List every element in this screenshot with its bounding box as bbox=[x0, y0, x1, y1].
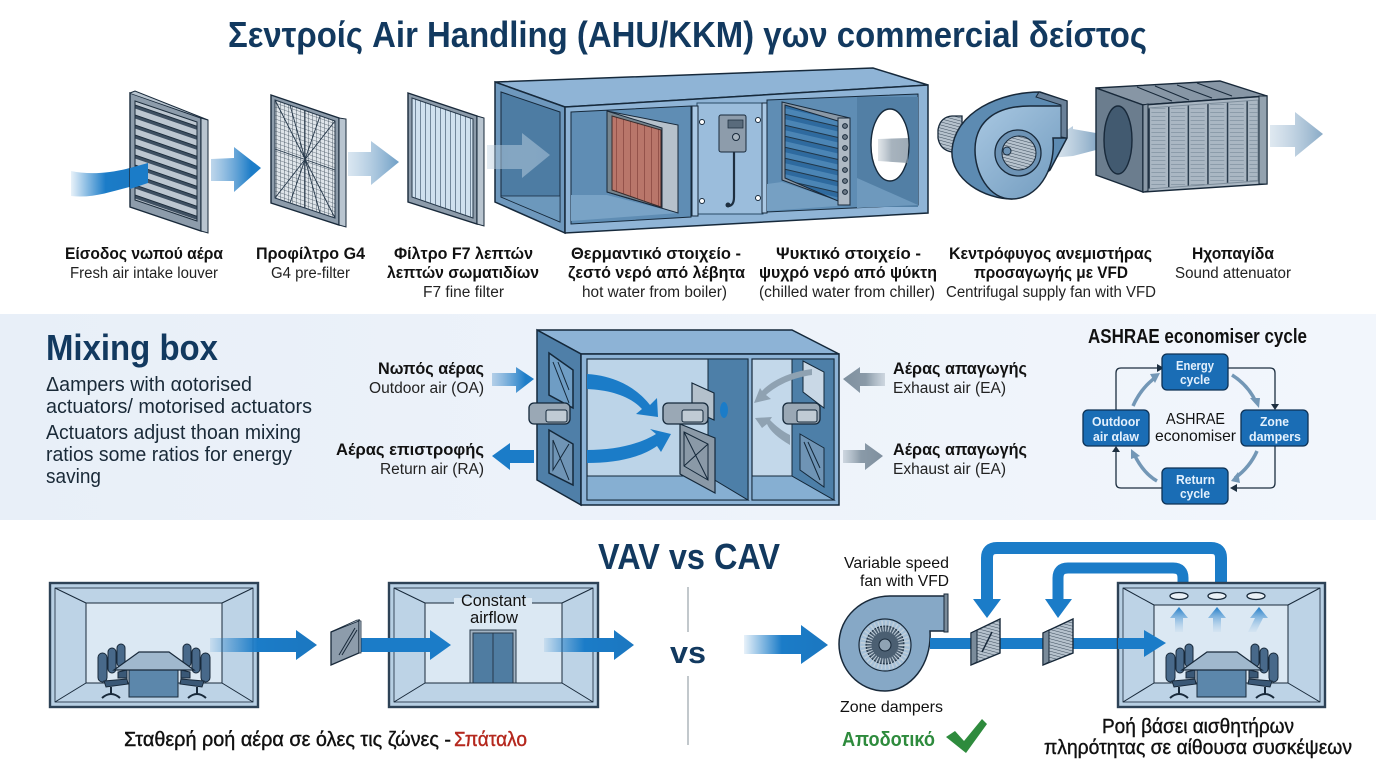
box left face bbox=[537, 330, 581, 505]
icon: CAV damper bbox=[331, 620, 361, 665]
label: F7: λεπτών σωματιδίων bbox=[387, 263, 539, 282]
label: heating coil: hot water from boiler) bbox=[582, 284, 727, 301]
arrow: intake air into louver bbox=[71, 163, 148, 197]
panel: mixing box band bbox=[0, 314, 1376, 520]
VAV room bbox=[1118, 583, 1325, 707]
label: attenuator: Sound attenuator bbox=[1175, 265, 1291, 282]
icon: F7 fine filter bbox=[408, 93, 484, 226]
arrow: attenuator outlet bbox=[1270, 112, 1323, 157]
ASHRAE economiser cycle bbox=[1083, 326, 1308, 504]
label: fan: Centrifugal supply fan with VFD bbox=[946, 284, 1156, 301]
heading: mixing box: Mixing box bbox=[46, 327, 218, 368]
centre label: economiser bbox=[1155, 428, 1237, 445]
icon: sound attenuator bbox=[1096, 81, 1267, 192]
icon: G4 pre-filter bbox=[271, 95, 346, 227]
label: G4: Προφίλτρο G4 bbox=[256, 244, 366, 263]
vs label: vs bbox=[670, 635, 706, 670]
caption: VAV bbox=[1044, 716, 1352, 759]
label: heating coil: Θερμαντικό στοιχείο - bbox=[571, 244, 741, 263]
label: cooling coil: Ψυκτικό στοιχείο - bbox=[776, 244, 921, 263]
arrow: CAV 2 bbox=[361, 630, 451, 660]
arrow: coil to fan bbox=[878, 138, 908, 163]
labels: mixing left: Return air (RA) bbox=[380, 461, 484, 478]
casing front face bbox=[565, 85, 928, 233]
ceiling vents bbox=[1170, 592, 1265, 600]
right actuator bbox=[783, 403, 820, 424]
node: energy cycle: cycle bbox=[1180, 372, 1210, 387]
label: louver: Είσοδος νωπού αέρα bbox=[65, 244, 223, 263]
exhaust chamber bbox=[752, 359, 834, 500]
icon: fresh air louver bbox=[130, 91, 208, 233]
label: G4: G4 pre-filter bbox=[271, 265, 350, 282]
title: Σεντροίς Air Handling (AHU/KKM) γων commercial δείστος bbox=[228, 14, 1147, 55]
arrow: fan to attenuator bbox=[1050, 126, 1096, 158]
CAV room 1 bbox=[50, 583, 258, 707]
constant airflow label bbox=[461, 591, 526, 627]
caption: VAV: πληρότητας σε αίθουσα συσκέψεων bbox=[1044, 737, 1352, 759]
node: zone dampers: dampers bbox=[1249, 429, 1301, 444]
centre label bbox=[1155, 411, 1237, 445]
connector arrowheads bbox=[1112, 364, 1279, 492]
label: fan bbox=[946, 244, 1156, 301]
mixing box casing bbox=[529, 330, 839, 505]
casing left open face bbox=[495, 82, 565, 233]
arrow: grey exhaust top bbox=[754, 369, 812, 403]
grey cycle arrowheads bbox=[1131, 373, 1260, 483]
node: energy cycle bbox=[1162, 354, 1228, 390]
label background bbox=[454, 598, 532, 608]
label: heating coil bbox=[568, 244, 746, 301]
AHU casing bbox=[495, 68, 928, 233]
node: outdoor air: air αlaw bbox=[1093, 429, 1140, 444]
icon: check mark bbox=[946, 719, 987, 753]
zone damper 2 bbox=[1043, 619, 1073, 665]
node: return cycle bbox=[1162, 468, 1228, 504]
label: zone dampers: Zone dampers bbox=[840, 699, 943, 716]
meeting table bbox=[98, 644, 210, 698]
arrow head over room bbox=[1118, 630, 1166, 657]
labels: mixing right: Exhaust air (EA) bbox=[893, 461, 1006, 478]
labels: mixing left: Νωπός αέρας bbox=[378, 359, 484, 378]
caption: VAV: Ροή βάσει αισθητήρων bbox=[1102, 716, 1294, 738]
arrow: exhaust out bbox=[843, 443, 883, 470]
labels: mixing right bbox=[893, 359, 1027, 478]
labels: mixing left bbox=[336, 359, 484, 478]
label: louver: Fresh air intake louver bbox=[70, 265, 218, 282]
connectors bbox=[1116, 368, 1275, 488]
heating coil bbox=[607, 111, 678, 213]
arrow: louver to G4 bbox=[211, 147, 261, 192]
centre label: ASHRAE bbox=[1166, 411, 1225, 428]
label: heating coil: ζεστό νερό από λέβητα bbox=[568, 263, 746, 282]
arrow: return air bbox=[492, 443, 534, 470]
control panel bbox=[692, 103, 767, 216]
text block: mixing description: Actuators adjust thoan mixing bbox=[46, 422, 301, 444]
arrow: F7 through casing bbox=[487, 133, 550, 178]
arrow: CAV 3 bbox=[544, 630, 634, 660]
cooling coil bbox=[782, 102, 850, 205]
box top bbox=[537, 330, 839, 354]
arrow: grey exhaust bottom bbox=[755, 417, 790, 445]
label: attenuator bbox=[1175, 244, 1291, 282]
label: cooling coil: (chilled water from chiller) bbox=[759, 284, 935, 301]
casing top face bbox=[495, 68, 928, 107]
arrow: G4 to F7 bbox=[348, 141, 399, 185]
arrow: VAV inlet bbox=[744, 625, 828, 664]
ASHRAE heading: ASHRAE economiser cycle bbox=[1088, 326, 1307, 348]
text block: mixing description: ratios some ratios for energy bbox=[46, 444, 292, 466]
label: F7 bbox=[387, 244, 539, 301]
text block: mixing description: saving bbox=[46, 466, 101, 488]
caption: CAV: Σπάταλο bbox=[454, 729, 527, 751]
node: zone dampers: Zone bbox=[1260, 414, 1289, 429]
label: cooling coil: ψυχρό νερό από ψύκτη bbox=[759, 263, 937, 282]
arrow: blue mix top bbox=[587, 374, 658, 417]
node: outdoor air bbox=[1083, 410, 1149, 446]
label: fan: Κεντρόφυγος ανεμιστήρας bbox=[949, 244, 1152, 263]
labels: mixing left: Αέρας επιστροφής bbox=[336, 440, 484, 459]
outlet opening bbox=[871, 109, 909, 181]
main chamber bbox=[587, 359, 748, 500]
arrow: blue mix bottom bbox=[587, 429, 671, 463]
labels: mixing right: Αέρας απαγωγής bbox=[893, 359, 1027, 378]
label: efficient: Αποδοτικό bbox=[842, 729, 935, 751]
arrow: VAV duct bbox=[930, 630, 1166, 657]
labels: mixing right: Exhaust air (EA) bbox=[893, 380, 1006, 397]
label: F7: Φίλτρο F7 λεπτών bbox=[394, 244, 533, 263]
labels: mixing right: Αέρας απαγωγής bbox=[893, 440, 1027, 459]
label: cooling coil bbox=[759, 244, 937, 301]
door bbox=[470, 630, 516, 683]
node: return cycle: cycle bbox=[1180, 486, 1210, 501]
caption: CAV: Σταθερή ροή αέρα σε όλες τις ζώνες - bbox=[124, 729, 451, 751]
text block: mixing description: Δampers with αotorised bbox=[46, 374, 252, 396]
node: zone dampers bbox=[1241, 410, 1308, 446]
left actuator bbox=[529, 403, 570, 424]
heater bay bbox=[571, 106, 691, 224]
label: louver bbox=[65, 244, 223, 282]
heading: VAV vs CAV: VAV vs CAV bbox=[598, 536, 780, 577]
node: energy cycle: Energy bbox=[1176, 358, 1215, 373]
centre damper bbox=[663, 383, 715, 493]
labels: mixing left: Outdoor air (OA) bbox=[369, 380, 484, 397]
return loop 1 bbox=[973, 548, 1221, 618]
text block: mixing description bbox=[46, 374, 312, 488]
CAV room 2 bbox=[389, 583, 598, 707]
return loop 2 bbox=[1045, 568, 1183, 618]
icon: centrifugal fan bbox=[938, 92, 1067, 199]
arrow: exhaust air top bbox=[843, 367, 885, 393]
label: VFD fan: Variable speed bbox=[844, 555, 949, 572]
arrow overlay through louver bbox=[130, 163, 148, 189]
label: F7: F7 fine filter bbox=[423, 284, 504, 301]
zone damper 1 bbox=[971, 619, 1000, 665]
constant airflow label: airflow bbox=[470, 608, 519, 627]
label: G4 bbox=[256, 244, 366, 282]
text block: mixing description: actuators/ motorised actuators bbox=[46, 396, 312, 418]
box front bbox=[581, 354, 839, 505]
label: fan: προσαγωγής με VFD bbox=[974, 263, 1128, 282]
grey cycle arrows bbox=[1133, 375, 1257, 481]
label: VFD fan bbox=[844, 555, 949, 590]
node: return cycle: Return bbox=[1176, 472, 1215, 487]
icon: VAV fan bbox=[839, 594, 948, 691]
meeting table bbox=[1166, 644, 1278, 698]
constant airflow label: Constant bbox=[461, 591, 526, 610]
label: attenuator: Ηχοπαγίδα bbox=[1192, 244, 1274, 263]
node: outdoor air: Outdoor bbox=[1092, 414, 1140, 429]
cooling bay bbox=[767, 94, 918, 212]
label: VFD fan: fan with VFD bbox=[860, 573, 949, 590]
arrow: outdoor air bbox=[492, 367, 534, 393]
up arrows bbox=[1170, 607, 1268, 632]
arrow: CAV 1 bbox=[210, 630, 317, 660]
